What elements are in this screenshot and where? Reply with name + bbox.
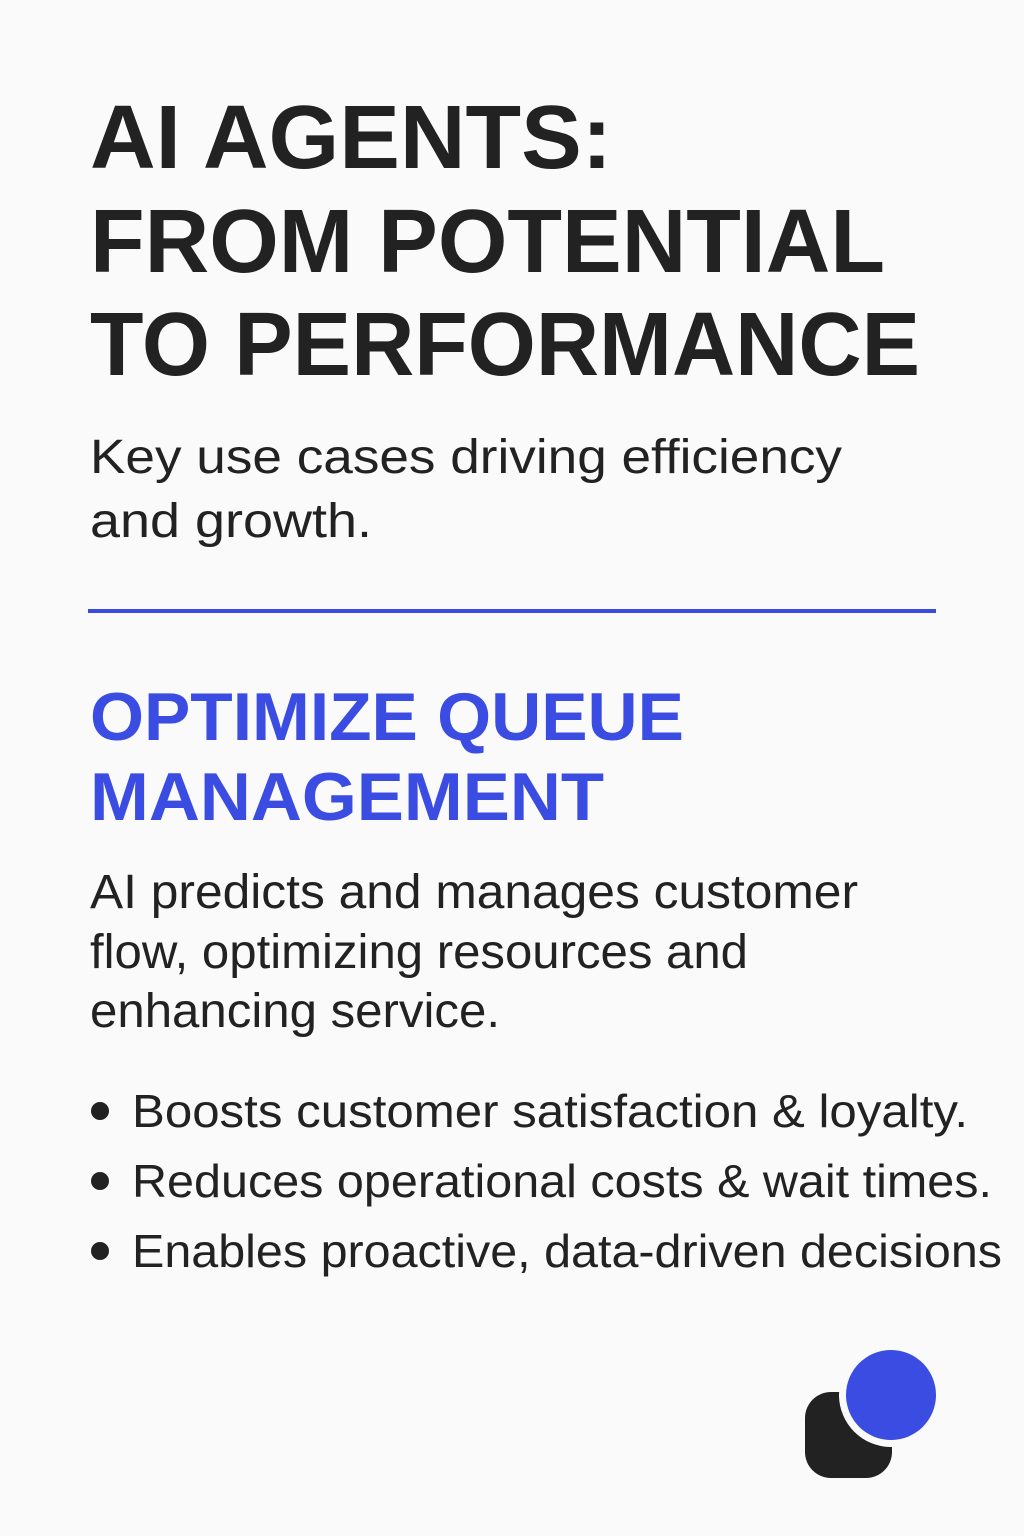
icon: logo <box>805 1343 943 1478</box>
title <box>90 88 920 395</box>
bullet list: Enables proactive, data-driven decisions <box>132 1225 1002 1277</box>
body text: AI predicts and manages customer <box>90 866 858 919</box>
body text: flow, optimizing resources and <box>90 926 748 979</box>
body text <box>90 866 858 1038</box>
title: AI AGENTS: <box>90 88 612 188</box>
subtitle: and growth. <box>90 495 372 548</box>
bullet list: Boosts customer satisfaction & loyalty. <box>132 1085 968 1137</box>
bullet list: Reduces operational costs & wait times. <box>132 1155 992 1207</box>
subtitle: Key use cases driving efficiency <box>90 431 842 484</box>
section heading: OPTIMIZE QUEUE <box>90 679 684 755</box>
subtitle <box>90 431 842 548</box>
body text: enhancing service. <box>90 985 500 1038</box>
title: FROM POTENTIAL <box>90 192 885 292</box>
section heading <box>90 679 684 835</box>
bullet list <box>91 1085 1002 1277</box>
section heading: MANAGEMENT <box>90 759 604 835</box>
title: TO PERFORMANCE <box>90 295 920 395</box>
